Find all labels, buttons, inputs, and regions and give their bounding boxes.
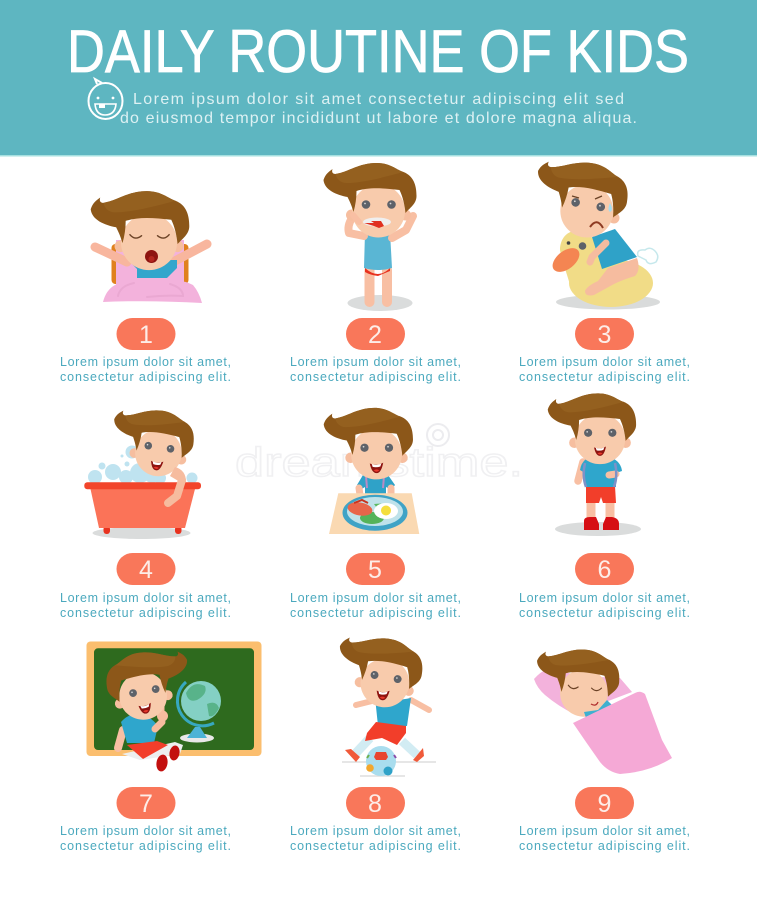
caption 4: consectetur adipiscing elit.	[60, 606, 231, 620]
watermark	[235, 424, 523, 485]
caption 1: Lorem ipsum dolor sit amet,	[60, 355, 231, 369]
watermark: dreamstime.	[235, 439, 523, 485]
header band	[0, 0, 757, 156]
number badge 5: 5	[368, 556, 382, 584]
panel: step 9 sleep	[519, 646, 690, 853]
illustration: boy kicking a ball	[331, 631, 436, 776]
caption 7: Lorem ipsum dolor sit amet,	[60, 824, 231, 838]
caption 6	[519, 591, 690, 620]
caption 5: Lorem ipsum dolor sit amet,	[290, 591, 461, 605]
number badge 1	[116, 318, 176, 350]
number badge 9	[575, 787, 634, 819]
number badge 2	[346, 318, 405, 350]
illustration: boy in bathtub	[84, 404, 201, 539]
caption 5	[290, 591, 461, 620]
caption 9: consectetur adipiscing elit.	[519, 839, 690, 853]
number badge 9: 9	[598, 790, 611, 818]
number badge 6	[575, 553, 634, 585]
panel: step 8 play	[290, 631, 461, 853]
caption 2	[290, 355, 461, 384]
caption 8: Lorem ipsum dolor sit amet,	[290, 824, 461, 838]
panel: step 7 school	[60, 642, 262, 853]
caption 6: Lorem ipsum dolor sit amet,	[519, 591, 690, 605]
caption 9: Lorem ipsum dolor sit amet,	[519, 824, 690, 838]
caption 5: consectetur adipiscing elit.	[290, 606, 461, 620]
illustration: boy standing with backpack	[548, 393, 641, 536]
number badge 7	[116, 787, 176, 819]
illustration: boy eating breakfast	[324, 408, 419, 534]
caption 3: consectetur adipiscing elit.	[519, 370, 690, 384]
panel: step 4 bath	[60, 404, 231, 620]
caption 3	[519, 355, 690, 384]
caption 7: consectetur adipiscing elit.	[60, 839, 231, 853]
caption 2: Lorem ipsum dolor sit amet,	[290, 355, 461, 369]
caption 7	[60, 824, 231, 853]
panel: step 2 brush teeth	[290, 163, 461, 384]
caption 9	[519, 824, 690, 853]
number badge 4	[116, 553, 176, 585]
panel: step 6 school bag	[519, 393, 690, 620]
illustration: boy yawning in bed	[91, 191, 207, 303]
caption 8	[290, 824, 461, 853]
caption 4: Lorem ipsum dolor sit amet,	[60, 591, 231, 605]
illustration: boy at chalkboard with globe	[86, 642, 262, 772]
panel: step 5 breakfast	[290, 408, 461, 620]
subtitle text	[120, 91, 637, 127]
caption 3: Lorem ipsum dolor sit amet,	[519, 355, 690, 369]
number badge 8	[346, 787, 405, 819]
number badge 5	[346, 553, 405, 585]
title: DAILY ROUTINE OF KIDS	[67, 18, 689, 85]
number badge 4: 4	[139, 556, 153, 584]
subtitle text: do eiusmod tempor incididunt ut labore et dolore magna aliqua.	[120, 110, 637, 127]
icon: smiling face	[88, 79, 122, 119]
number badge 8: 8	[368, 790, 382, 818]
number badge 1: 1	[139, 321, 153, 349]
subtitle text: Lorem ipsum dolor sit amet consectetur adipiscing elit sed	[133, 91, 624, 108]
caption 6: consectetur adipiscing elit.	[519, 606, 690, 620]
panel: step 1 wake up	[60, 191, 231, 384]
caption 4	[60, 591, 231, 620]
illustration: boy sleeping under blanket	[533, 646, 672, 774]
caption 1	[60, 355, 231, 384]
number badge 6: 6	[598, 556, 611, 584]
caption 2: consectetur adipiscing elit.	[290, 370, 461, 384]
number badge 2: 2	[368, 321, 382, 349]
panel: step 3 potty	[519, 154, 690, 384]
illustration: boy on duck potty	[528, 154, 660, 310]
number badge 7: 7	[139, 790, 153, 818]
number badge 3: 3	[598, 321, 611, 349]
caption 8: consectetur adipiscing elit.	[290, 839, 461, 853]
caption 1: consectetur adipiscing elit.	[60, 370, 231, 384]
number badge 3	[575, 318, 634, 350]
illustration: boy brushing teeth	[324, 163, 416, 311]
